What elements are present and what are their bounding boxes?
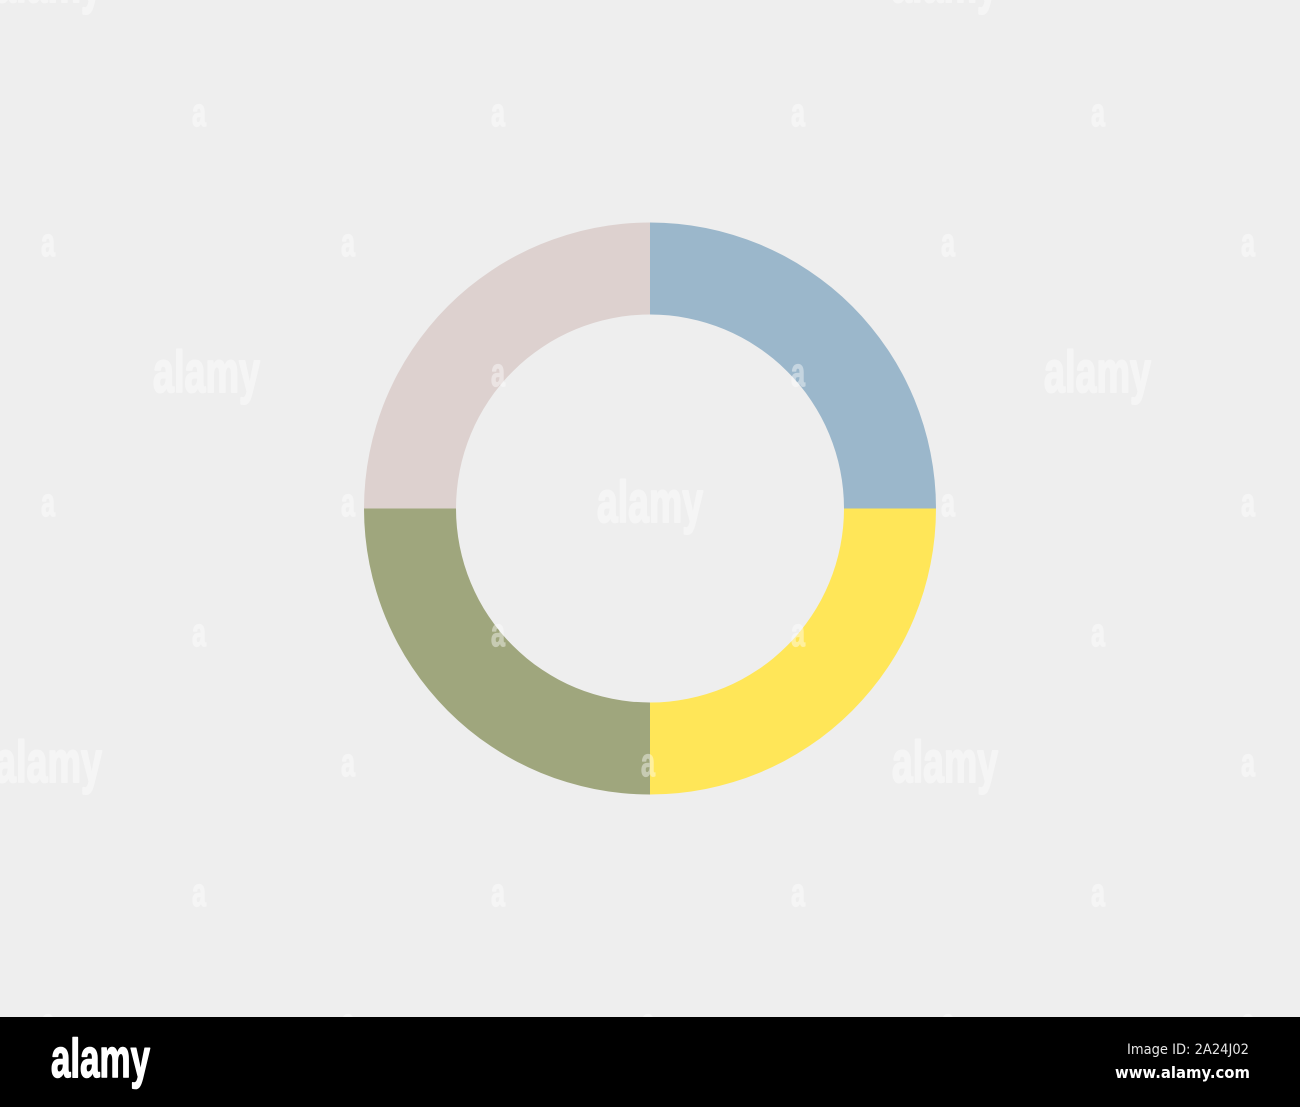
watermark pattern: alamy xyxy=(597,470,703,535)
watermark pattern: a xyxy=(641,741,655,785)
segment: blue, top right xyxy=(650,222,936,508)
watermark pattern: a xyxy=(41,481,55,525)
watermark pattern: a xyxy=(641,1001,655,1045)
watermark pattern: a xyxy=(341,741,355,785)
watermark pattern: a xyxy=(791,611,805,655)
watermark pattern: alamy xyxy=(1044,340,1151,405)
watermark pattern: a xyxy=(791,871,805,915)
watermark pattern: a xyxy=(1241,481,1255,525)
segment: yellow, bottom right xyxy=(650,508,936,794)
segment: pale pink, top left xyxy=(364,222,650,508)
watermark pattern: a xyxy=(192,871,206,915)
footer logo: alamy xyxy=(51,1027,150,1089)
watermark pattern: a xyxy=(491,91,505,135)
watermark pattern: a xyxy=(941,221,955,265)
watermark pattern: alamy xyxy=(153,340,260,405)
watermark pattern: a xyxy=(1091,91,1105,135)
watermark pattern: a xyxy=(491,871,505,915)
image id: Image ID: 2A24J02 xyxy=(1127,1042,1249,1058)
watermark pattern: alamy xyxy=(892,730,998,795)
watermark pattern: a xyxy=(192,91,206,135)
segment: olive, bottom left xyxy=(364,508,650,794)
watermark pattern: a xyxy=(791,91,805,135)
watermark pattern: a xyxy=(341,221,355,265)
watermark pattern: a xyxy=(41,221,55,265)
watermark pattern: a xyxy=(1091,871,1105,915)
watermark pattern: a xyxy=(1091,611,1105,655)
watermark pattern: a xyxy=(341,1001,355,1045)
watermark pattern: a xyxy=(41,1001,55,1045)
watermark pattern: a xyxy=(1241,221,1255,265)
watermark pattern: a xyxy=(791,351,805,395)
watermark pattern: a xyxy=(1241,741,1255,785)
watermark pattern: a xyxy=(491,351,505,395)
website address: www.alamy.com xyxy=(1115,1063,1250,1082)
watermark pattern: a xyxy=(941,481,955,525)
watermark pattern: a xyxy=(491,611,505,655)
watermark pattern: a xyxy=(341,481,355,525)
donut chart xyxy=(364,222,936,794)
watermark pattern: a xyxy=(1241,1001,1255,1045)
footer bar xyxy=(0,1017,1300,1107)
watermark pattern: a xyxy=(192,611,206,655)
watermark pattern: a xyxy=(941,1001,955,1045)
